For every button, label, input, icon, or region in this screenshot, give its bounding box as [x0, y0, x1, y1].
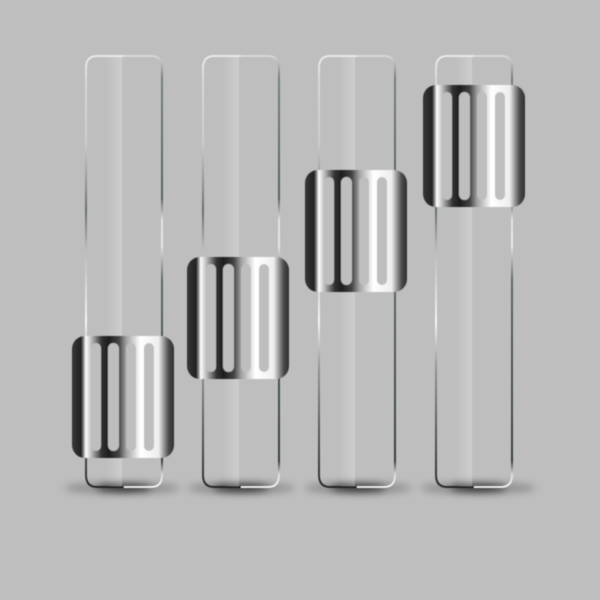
- track 4: [436, 56, 512, 487]
- shadow: track 2: [187, 482, 295, 494]
- slider handle 2: [187, 257, 289, 379]
- slider handle 1: [72, 336, 174, 458]
- slider handle 4: [423, 85, 525, 207]
- shadow: track 4: [420, 482, 536, 494]
- track 2: [203, 56, 279, 487]
- track 1: [86, 56, 162, 487]
- shadow: track 1: [64, 482, 180, 494]
- shadow: track 3: [304, 482, 412, 494]
- slider handle 3: [305, 170, 407, 292]
- track 3: [319, 56, 395, 487]
